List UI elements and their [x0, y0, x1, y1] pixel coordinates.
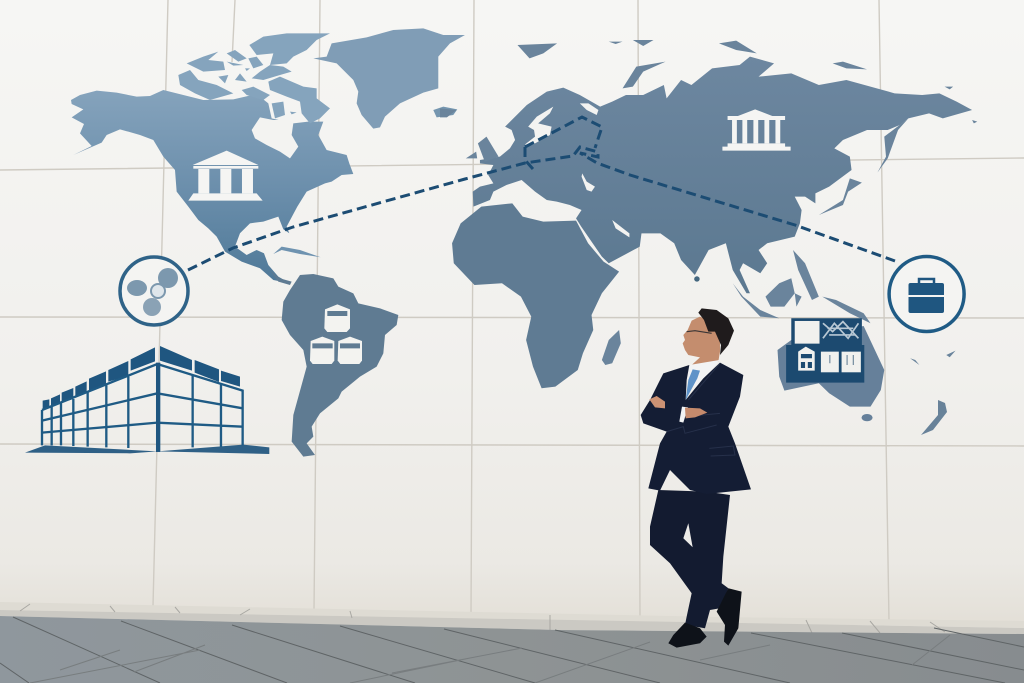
icon: bank North America — [188, 151, 263, 201]
map: Americas and Greenland — [71, 28, 465, 283]
hair — [698, 308, 734, 355]
shoe front — [668, 623, 707, 648]
Iceland fragment — [433, 107, 457, 117]
icon: bank Eurasia — [722, 109, 791, 151]
pavement — [0, 616, 1024, 683]
North America — [71, 90, 353, 283]
Tasmania — [862, 414, 873, 421]
Australia — [778, 326, 884, 407]
shirt — [688, 360, 719, 388]
hand right — [685, 408, 707, 418]
icon: briefcase circle — [889, 256, 964, 332]
shoe back — [717, 588, 742, 646]
trousers — [650, 490, 730, 628]
islands and peninsulas — [440, 40, 977, 365]
icon: cylinders South America — [310, 304, 362, 364]
hand left — [649, 396, 665, 408]
pavement kerb — [0, 602, 1024, 634]
inland seas — [525, 103, 629, 237]
Sri Lanka — [694, 276, 700, 282]
Cuba and Caribbean — [273, 247, 321, 257]
figure: businessman — [641, 308, 751, 648]
icon: coins circle — [120, 257, 188, 325]
dashed route line — [188, 117, 895, 270]
sleeve fold — [667, 363, 735, 456]
leg gap — [683, 523, 693, 547]
tie — [676, 369, 700, 456]
New Zealand — [921, 400, 947, 435]
jacket — [641, 363, 751, 494]
Canadian Arctic islands — [178, 33, 330, 123]
Africa — [452, 203, 619, 388]
South America — [270, 270, 398, 457]
icon: warehouse building — [25, 346, 269, 454]
map: Eurasia Africa Oceania — [440, 40, 977, 421]
icon panel: Australia dashboard — [786, 318, 864, 383]
Eurasia — [473, 57, 972, 293]
Greenland — [313, 28, 465, 129]
glasses — [687, 331, 712, 333]
Hudson Bay — [252, 117, 298, 158]
world map — [71, 28, 977, 457]
neck and face — [683, 317, 720, 365]
cuff — [679, 407, 688, 423]
